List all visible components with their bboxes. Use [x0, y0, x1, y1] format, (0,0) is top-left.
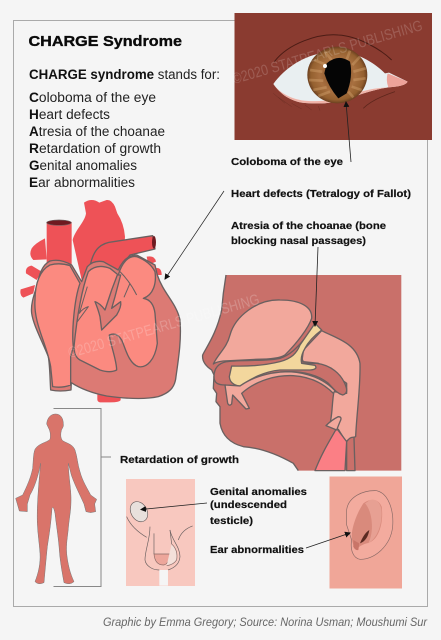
footer credit: Graphic by Emma Gregory; Source: Norina Usman; Moushumi Sur — [103, 617, 428, 629]
panel: genital illustration — [126, 479, 195, 586]
label: coloboma: Coloboma of the eye — [231, 156, 343, 168]
illustration: heart — [20, 200, 180, 402]
label: genital anomalies — [210, 486, 307, 527]
arrow: testicle — [141, 503, 207, 510]
acronym list: Genital anomalies — [29, 158, 137, 173]
acronym list: Coloboma of the eye — [29, 90, 156, 105]
acronym list: Retardation of growth — [29, 141, 161, 156]
illustration: human body — [16, 414, 97, 584]
label: atresia — [231, 220, 386, 247]
title: CHARGE Syndrome — [28, 33, 182, 50]
label: ear abnormalities: Ear abnormalities — [210, 544, 304, 556]
label: heart defects: Heart defects (Tetralogy of Fallot) — [231, 188, 411, 200]
acronym list — [29, 90, 165, 190]
label: atresia: blocking nasal passages) — [231, 235, 366, 247]
arrow: heart defects — [165, 191, 224, 279]
acronym list: Atresia of the choanae — [29, 124, 165, 139]
watermark: ©2020 STATPEARLS PUBLISHING — [66, 291, 261, 362]
acronym list: Ear abnormalities — [29, 175, 135, 190]
label: atresia: Atresia of the choanae (bone — [231, 220, 386, 232]
label: genital anomalies: Genital anomalies — [210, 486, 307, 498]
arrow: atresia — [315, 247, 318, 326]
label: growth: Retardation of growth — [120, 454, 239, 466]
panel: ear illustration — [330, 476, 402, 588]
subtitle: CHARGE syndrome stands for: — [29, 67, 220, 82]
arrow: coloboma — [346, 102, 351, 162]
arrow: ear — [306, 533, 350, 548]
label: genital anomalies: testicle) — [210, 515, 253, 527]
acronym list: Heart defects — [29, 107, 110, 122]
illustration: nasal cross-section — [203, 275, 401, 471]
label: genital anomalies: (undescended — [210, 499, 287, 511]
panel: eye illustration — [230, 13, 432, 140]
bracket: growth — [54, 408, 111, 586]
